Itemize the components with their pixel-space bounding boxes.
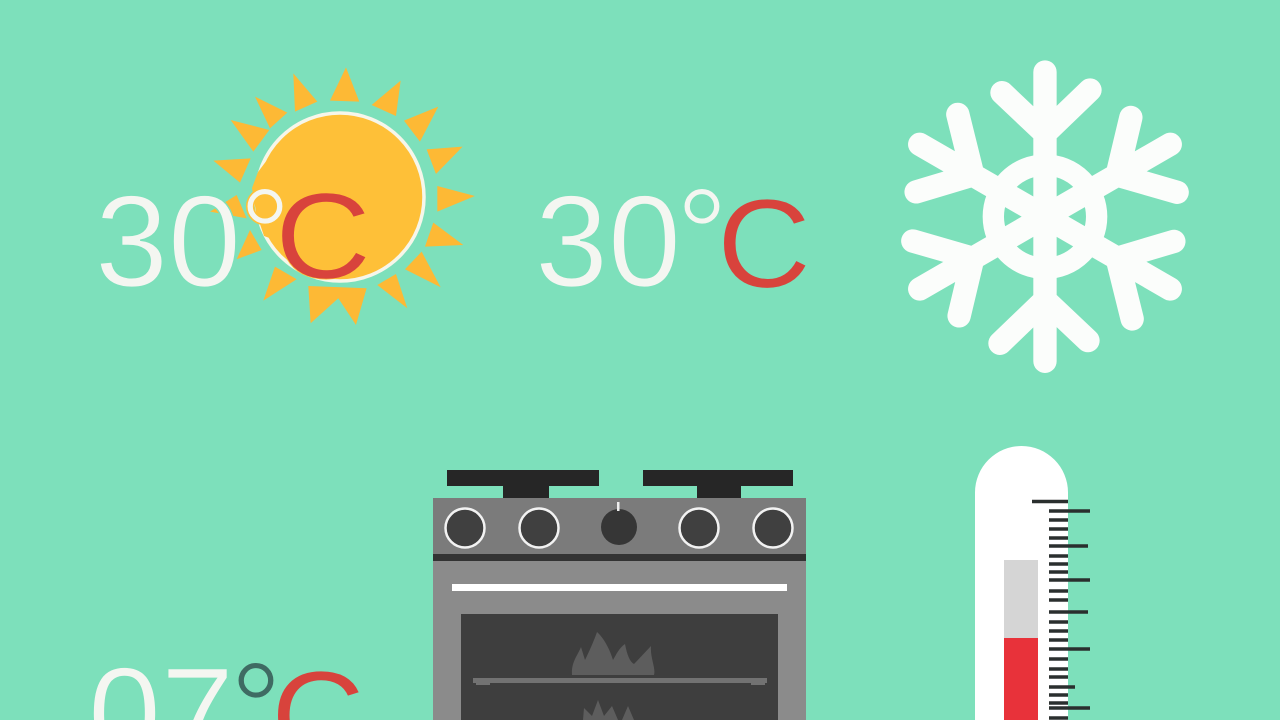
temperature: 30 degrees: C — [717, 173, 811, 314]
burner grates — [447, 470, 793, 498]
temperature: 30 degrees — [535, 161, 811, 314]
icon: sun — [210, 67, 475, 325]
temperature: 30 degrees: 30 — [535, 168, 681, 314]
temperature: 30 degrees over sun: 30 — [95, 168, 241, 314]
oven rack — [473, 678, 767, 685]
temperature: 30 degrees over sun: C — [275, 168, 371, 304]
knobs — [446, 508, 792, 548]
sun disc left edge — [252, 160, 280, 240]
icon: thermometer — [975, 446, 1090, 720]
icon: oven — [433, 470, 806, 720]
control panel — [433, 498, 806, 554]
centre knob — [601, 502, 637, 545]
thermometer mercury — [1004, 638, 1038, 720]
sun rays — [210, 67, 475, 325]
thermometer scale empty — [1004, 560, 1038, 638]
flame lower — [583, 700, 634, 720]
thermometer ticks — [1032, 502, 1090, 718]
temperature: 30 degrees over sun — [95, 161, 371, 314]
temperature: 30 degrees over sun: ° — [239, 161, 291, 307]
oven body — [433, 498, 806, 720]
flame upper — [572, 632, 654, 675]
temperature: 30 degrees: ° — [676, 161, 728, 307]
sun disc — [256, 113, 424, 281]
temperature: 07 degrees — [88, 635, 365, 720]
oven handle — [452, 584, 787, 591]
oven window — [461, 614, 778, 720]
icon: snowflake — [897, 72, 1193, 361]
thermometer tube — [975, 446, 1068, 720]
